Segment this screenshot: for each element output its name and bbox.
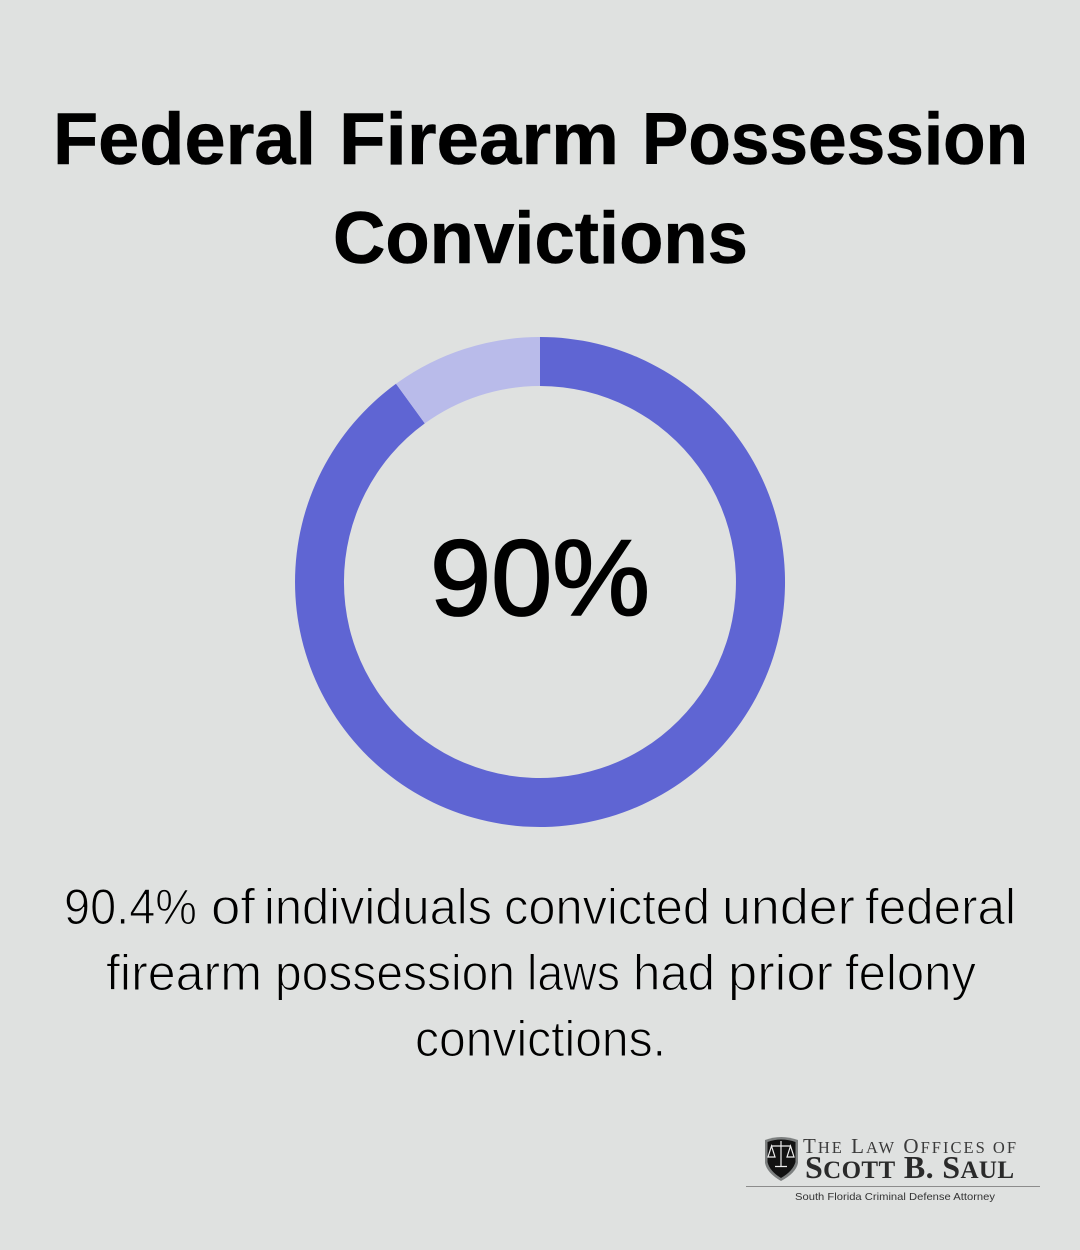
donut value: 90% — [430, 517, 650, 638]
description text: convictions. — [415, 1011, 666, 1067]
logo: The Law Offices of Scott B. Saul — [746, 1134, 1040, 1203]
description text: under — [722, 879, 855, 935]
title: Convictions — [333, 198, 748, 279]
logo name — [803, 1134, 1016, 1185]
donut segment: 90% — [295, 337, 785, 827]
title — [53, 99, 1028, 279]
description text: of — [211, 879, 255, 935]
donut chart: 90% — [295, 337, 785, 827]
description text: individuals — [264, 879, 492, 935]
description text: federal — [865, 879, 1016, 935]
description text: firearm — [106, 945, 262, 1001]
description text: felony — [845, 945, 976, 1001]
description text: possession — [275, 945, 515, 1001]
title: Possession — [642, 99, 1028, 180]
title: Firearm — [339, 99, 619, 180]
description text: had — [633, 945, 715, 1001]
icon: scales of justice shield — [765, 1137, 798, 1181]
logo name: THE LAW OFFICES OF — [803, 1134, 1016, 1158]
description text: laws — [527, 945, 620, 1001]
logo tagline: South Florida Criminal Defense Attorney — [795, 1191, 996, 1203]
description text — [64, 879, 1016, 1067]
description text: 90.4% — [64, 879, 197, 935]
description text: convicted — [504, 879, 710, 935]
title: Federal — [53, 99, 316, 180]
description text: prior — [728, 945, 833, 1001]
logo name: SCOTT B. SAUL — [805, 1149, 1014, 1185]
donut segment: remaining 10% — [396, 337, 540, 423]
